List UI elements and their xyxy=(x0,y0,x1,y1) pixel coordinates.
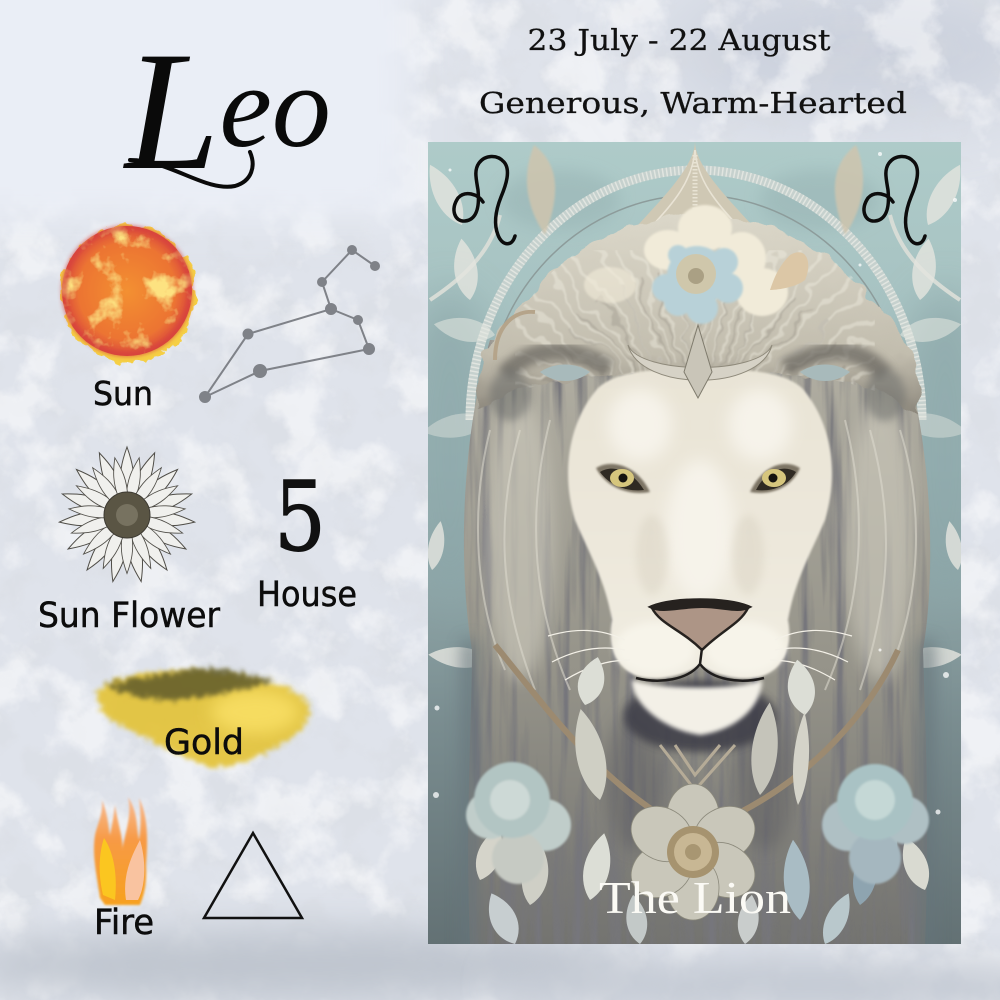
lower leaves xyxy=(469,654,936,949)
label: Fire: Fire xyxy=(94,903,154,943)
zodiac glyph left xyxy=(454,156,515,244)
label: Sun Flower: Sun Flower xyxy=(38,596,221,636)
constellation: Leo stars xyxy=(200,246,380,402)
flower crown xyxy=(584,205,808,398)
zodiac glyph right xyxy=(864,156,925,244)
icon: fire element triangle xyxy=(204,833,302,918)
central bottom flower xyxy=(630,784,756,920)
title: Leo xyxy=(123,17,331,205)
date range heading: 23 July - 22 August xyxy=(528,23,831,57)
upper mane crest xyxy=(477,142,919,580)
label: House: House xyxy=(257,575,357,615)
icon: sun xyxy=(61,226,197,362)
icon: fire xyxy=(94,797,147,905)
rosette flowers xyxy=(466,762,929,884)
label: Sun: Sun xyxy=(93,374,153,413)
caption: The Lion: The Lion xyxy=(599,873,791,923)
panel: lion artwork xyxy=(428,142,961,944)
lion chin and beard xyxy=(624,680,776,752)
necklace and branches xyxy=(495,645,898,815)
title: Leo: L xyxy=(125,17,220,205)
feathers and side foliage xyxy=(420,145,970,670)
lion eyes xyxy=(596,464,800,493)
icon: gold smear xyxy=(97,668,310,768)
number: 5: 5 xyxy=(274,461,326,573)
label: Gold: Gold xyxy=(164,723,244,763)
traits heading: Generous, Warm-Hearted xyxy=(479,86,907,120)
snow dots xyxy=(433,152,957,814)
halo arc xyxy=(470,170,922,420)
icon: sunflower xyxy=(59,447,195,583)
lower mane xyxy=(462,340,934,960)
lion nose and mouth xyxy=(548,600,852,681)
title: Leo: eo xyxy=(220,41,331,172)
lion face xyxy=(568,370,832,678)
